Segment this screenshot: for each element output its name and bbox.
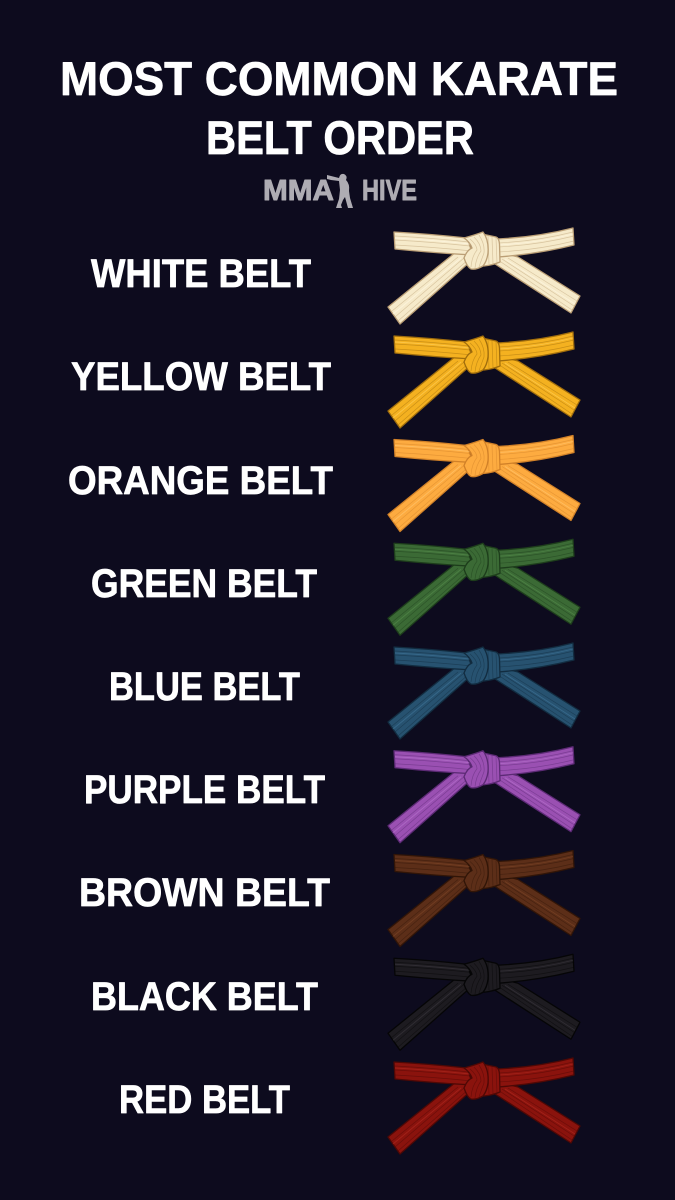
row: yellow belt: YELLOW BELT — [71, 355, 331, 399]
title: MOST COMMON KARATE — [60, 52, 618, 105]
icon: white belt — [388, 228, 580, 324]
row: black belt: BLACK BELT — [91, 975, 318, 1019]
row: black belt — [91, 954, 580, 1050]
icon: orange belt — [388, 436, 580, 532]
row: white belt: WHITE BELT — [91, 252, 311, 296]
icon: blue belt — [388, 643, 580, 739]
icon: red belt — [388, 1058, 580, 1154]
row: yellow belt — [71, 332, 580, 428]
row: brown belt — [79, 850, 580, 946]
row: red belt — [119, 1058, 580, 1154]
row: purple belt: PURPLE BELT — [84, 768, 325, 812]
logo: MMA Hive: HIVE — [362, 175, 417, 207]
icon: yellow belt — [388, 332, 580, 428]
logo: MMA Hive — [263, 174, 417, 208]
row: red belt: RED BELT — [119, 1078, 290, 1122]
icon: fighter silhouette — [327, 174, 353, 208]
row: brown belt: BROWN BELT — [79, 871, 330, 915]
logo: MMA Hive: MMA — [263, 175, 334, 207]
icon: brown belt — [388, 850, 580, 946]
row: blue belt: BLUE BELT — [109, 665, 300, 709]
icon: black belt — [388, 954, 580, 1050]
row: orange belt — [68, 436, 580, 532]
title — [60, 52, 618, 164]
icon: green belt — [388, 539, 580, 635]
row: green belt — [91, 539, 580, 635]
row: purple belt — [84, 747, 580, 843]
row: blue belt — [109, 643, 580, 739]
row: green belt: GREEN BELT — [91, 562, 317, 606]
title: BELT ORDER — [206, 111, 474, 164]
icon: purple belt — [388, 747, 580, 843]
row: white belt — [91, 228, 580, 324]
row: orange belt: ORANGE BELT — [68, 459, 333, 503]
